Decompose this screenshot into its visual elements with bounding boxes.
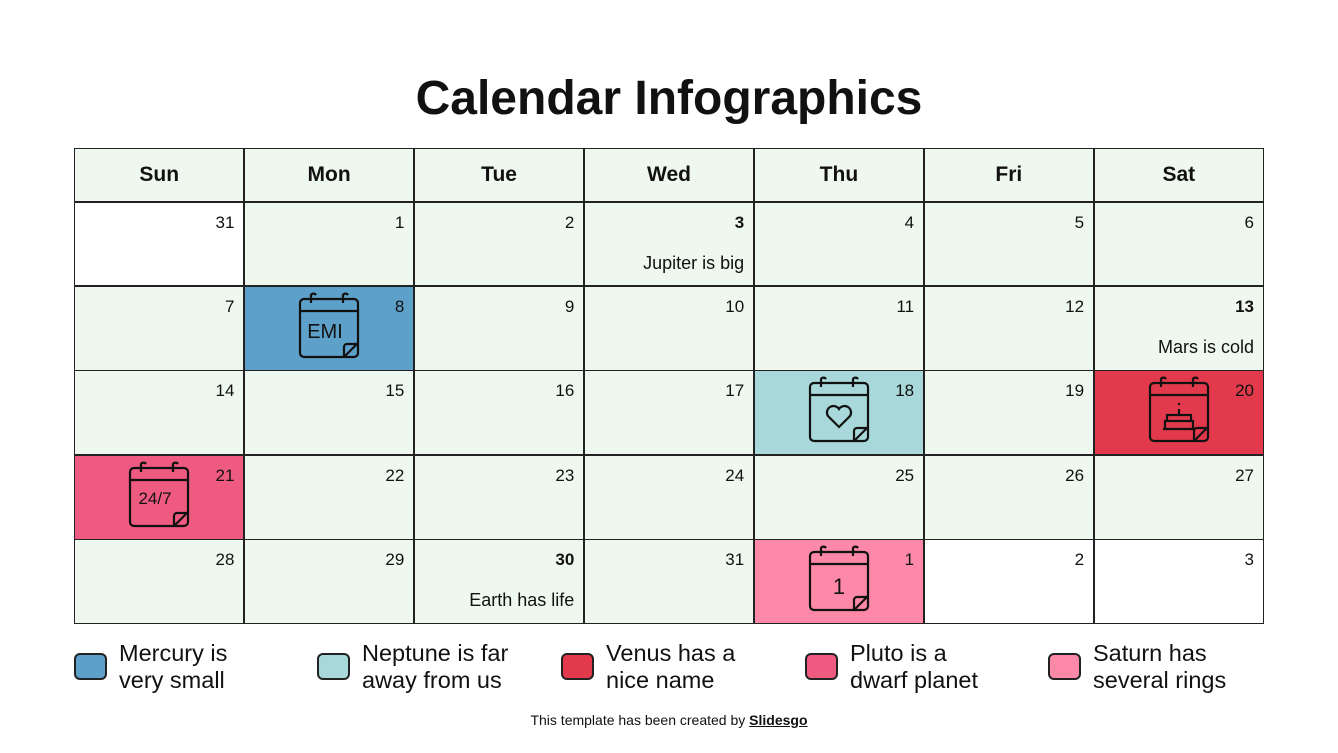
legend: Saturn: Saturn has xyxy=(1093,640,1207,666)
calendar grid: 13 xyxy=(1235,297,1254,316)
calendar grid: Fri xyxy=(995,163,1022,186)
calendar grid: 28 xyxy=(216,550,234,569)
calendar grid: Mars is cold xyxy=(1158,337,1254,357)
legend: Neptune: Neptune is far xyxy=(362,640,508,666)
calendar grid: 23 xyxy=(555,466,574,485)
calendar grid: Jupiter is big xyxy=(643,252,744,272)
calendar grid: 16 xyxy=(555,381,574,400)
calendar grid: 24 xyxy=(725,466,744,485)
calendar grid: 3 xyxy=(735,212,744,232)
legend: Saturn: several rings xyxy=(1093,667,1226,693)
calendar grid: 31 xyxy=(216,212,234,232)
legend: Venus: Venus has a xyxy=(606,640,735,666)
calendar grid: 17 xyxy=(725,381,744,400)
legend: Venus xyxy=(561,640,736,693)
calendar grid: 9 xyxy=(565,297,574,316)
calendar grid: 4 xyxy=(905,212,914,232)
calendar grid: Earth has life xyxy=(469,590,574,610)
cell: 18 heart xyxy=(755,371,923,454)
cell: 1 icon: 1 xyxy=(833,574,845,599)
legend: Saturn xyxy=(1048,640,1226,693)
cell: 1 icon: 1 xyxy=(905,550,914,569)
calendar grid: 26 xyxy=(1065,466,1084,485)
cell: 21 24/7: 21 xyxy=(216,466,234,485)
cell: 21 24/7 xyxy=(75,456,243,539)
calendar grid: 7 xyxy=(225,297,234,316)
cell: 21 24/7: 24/7 xyxy=(139,489,172,508)
legend: Pluto: Pluto is a xyxy=(850,640,947,666)
calendar grid: Sun xyxy=(139,163,179,186)
calendar grid: 5 xyxy=(1075,212,1084,232)
calendar grid: 27 xyxy=(1235,466,1254,485)
calendar grid: 2 xyxy=(1075,550,1084,569)
calendar grid: 1 xyxy=(395,212,404,232)
legend: Pluto: dwarf planet xyxy=(850,667,978,693)
calendar grid: Tue xyxy=(481,163,517,186)
calendar grid: 11 xyxy=(896,297,914,316)
cell: 20 cake: 20 xyxy=(1235,381,1254,400)
footer: This template has been created by Slidesgo xyxy=(530,712,808,728)
legend: Mercury: Mercury is xyxy=(119,640,227,666)
calendar grid: 22 xyxy=(385,466,404,485)
calendar grid: 31 xyxy=(725,550,744,569)
cell: 20 cake xyxy=(1095,371,1263,454)
legend: Neptune xyxy=(317,640,508,693)
calendar grid: 2 xyxy=(565,212,574,232)
legend: Mercury: very small xyxy=(119,667,225,693)
title: Calendar Infographics xyxy=(416,72,922,125)
cell: 8 EMI: EMI xyxy=(307,321,343,343)
legend: Venus: nice name xyxy=(606,667,714,693)
cell: 8 EMI xyxy=(245,287,413,370)
calendar grid: 30 xyxy=(555,550,574,569)
legend: Neptune: away from us xyxy=(362,667,502,693)
calendar grid: 10 xyxy=(725,297,744,316)
calendar grid: 29 xyxy=(385,550,404,569)
legend: Pluto xyxy=(805,640,978,693)
calendar grid: 14 xyxy=(216,381,234,400)
calendar grid: 6 xyxy=(1245,212,1254,232)
calendar grid: Sat xyxy=(1162,163,1195,186)
calendar grid: 19 xyxy=(1065,381,1084,400)
calendar grid: 3 xyxy=(1245,550,1254,569)
cell: 1 icon xyxy=(755,540,923,623)
calendar grid: 12 xyxy=(1065,297,1084,316)
calendar grid: 25 xyxy=(895,466,914,485)
legend: Mercury xyxy=(74,640,227,693)
calendar grid: Thu xyxy=(820,163,858,186)
calendar grid: Mon xyxy=(308,163,351,186)
calendar grid: Wed xyxy=(647,163,691,186)
cell: 8 EMI: 8 xyxy=(395,297,404,316)
calendar grid xyxy=(74,148,1264,624)
calendar grid: 15 xyxy=(385,381,404,400)
cell: 18 heart: 18 xyxy=(895,381,914,400)
